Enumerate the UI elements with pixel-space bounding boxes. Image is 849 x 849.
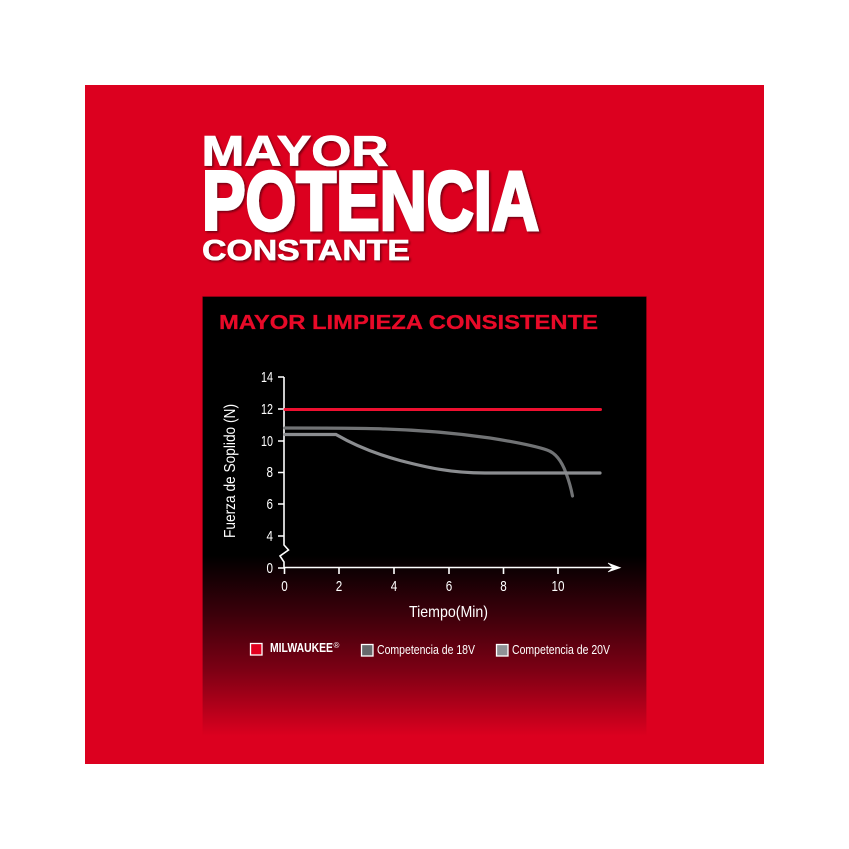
y axis (278, 377, 288, 568)
title: CONSTANTE (202, 235, 410, 267)
title: MAYOR (202, 128, 388, 176)
y axis title: Fuerza de Soplido (N) (222, 404, 239, 538)
y axis tick labels: 4 (266, 528, 273, 545)
title (202, 128, 539, 267)
line: competencia 18V (285, 428, 572, 496)
legend: milwaukee: ® (334, 641, 340, 650)
x axis tick labels: 10 (552, 578, 564, 595)
y axis tick labels (261, 369, 273, 577)
chart panel (202, 296, 647, 736)
panel heading: MAYOR LIMPIEZA CONSISTENTE (219, 311, 598, 334)
x axis tick labels: 4 (391, 578, 397, 595)
y axis tick labels: 8 (266, 464, 273, 481)
y axis tick labels: 12 (261, 401, 273, 418)
x axis tick labels: 6 (446, 578, 452, 595)
legend: competencia 18V: Competencia de 18V (377, 643, 476, 657)
line: milwaukee (285, 408, 600, 411)
y axis tick labels: 0 (266, 560, 273, 577)
red background panel (85, 85, 764, 764)
title: POTENCIA (202, 154, 539, 248)
x axis tick labels: 2 (336, 578, 342, 595)
x axis tick labels: 0 (281, 578, 288, 595)
y axis tick labels: 10 (261, 433, 273, 450)
line chart (222, 369, 620, 621)
legend: competencia 20V: Competencia de 20V (512, 643, 611, 657)
x axis title: Tiempo(Min) (409, 604, 488, 621)
y axis tick labels: 14 (261, 369, 273, 386)
legend: milwaukee: MILWAUKEE (270, 640, 333, 655)
x axis tick labels: 8 (500, 578, 507, 595)
legend (250, 640, 611, 657)
x axis tick labels (281, 578, 564, 595)
y axis tick labels: 6 (266, 496, 273, 513)
line: competencia 20V (285, 434, 600, 473)
x axis (284, 563, 620, 574)
